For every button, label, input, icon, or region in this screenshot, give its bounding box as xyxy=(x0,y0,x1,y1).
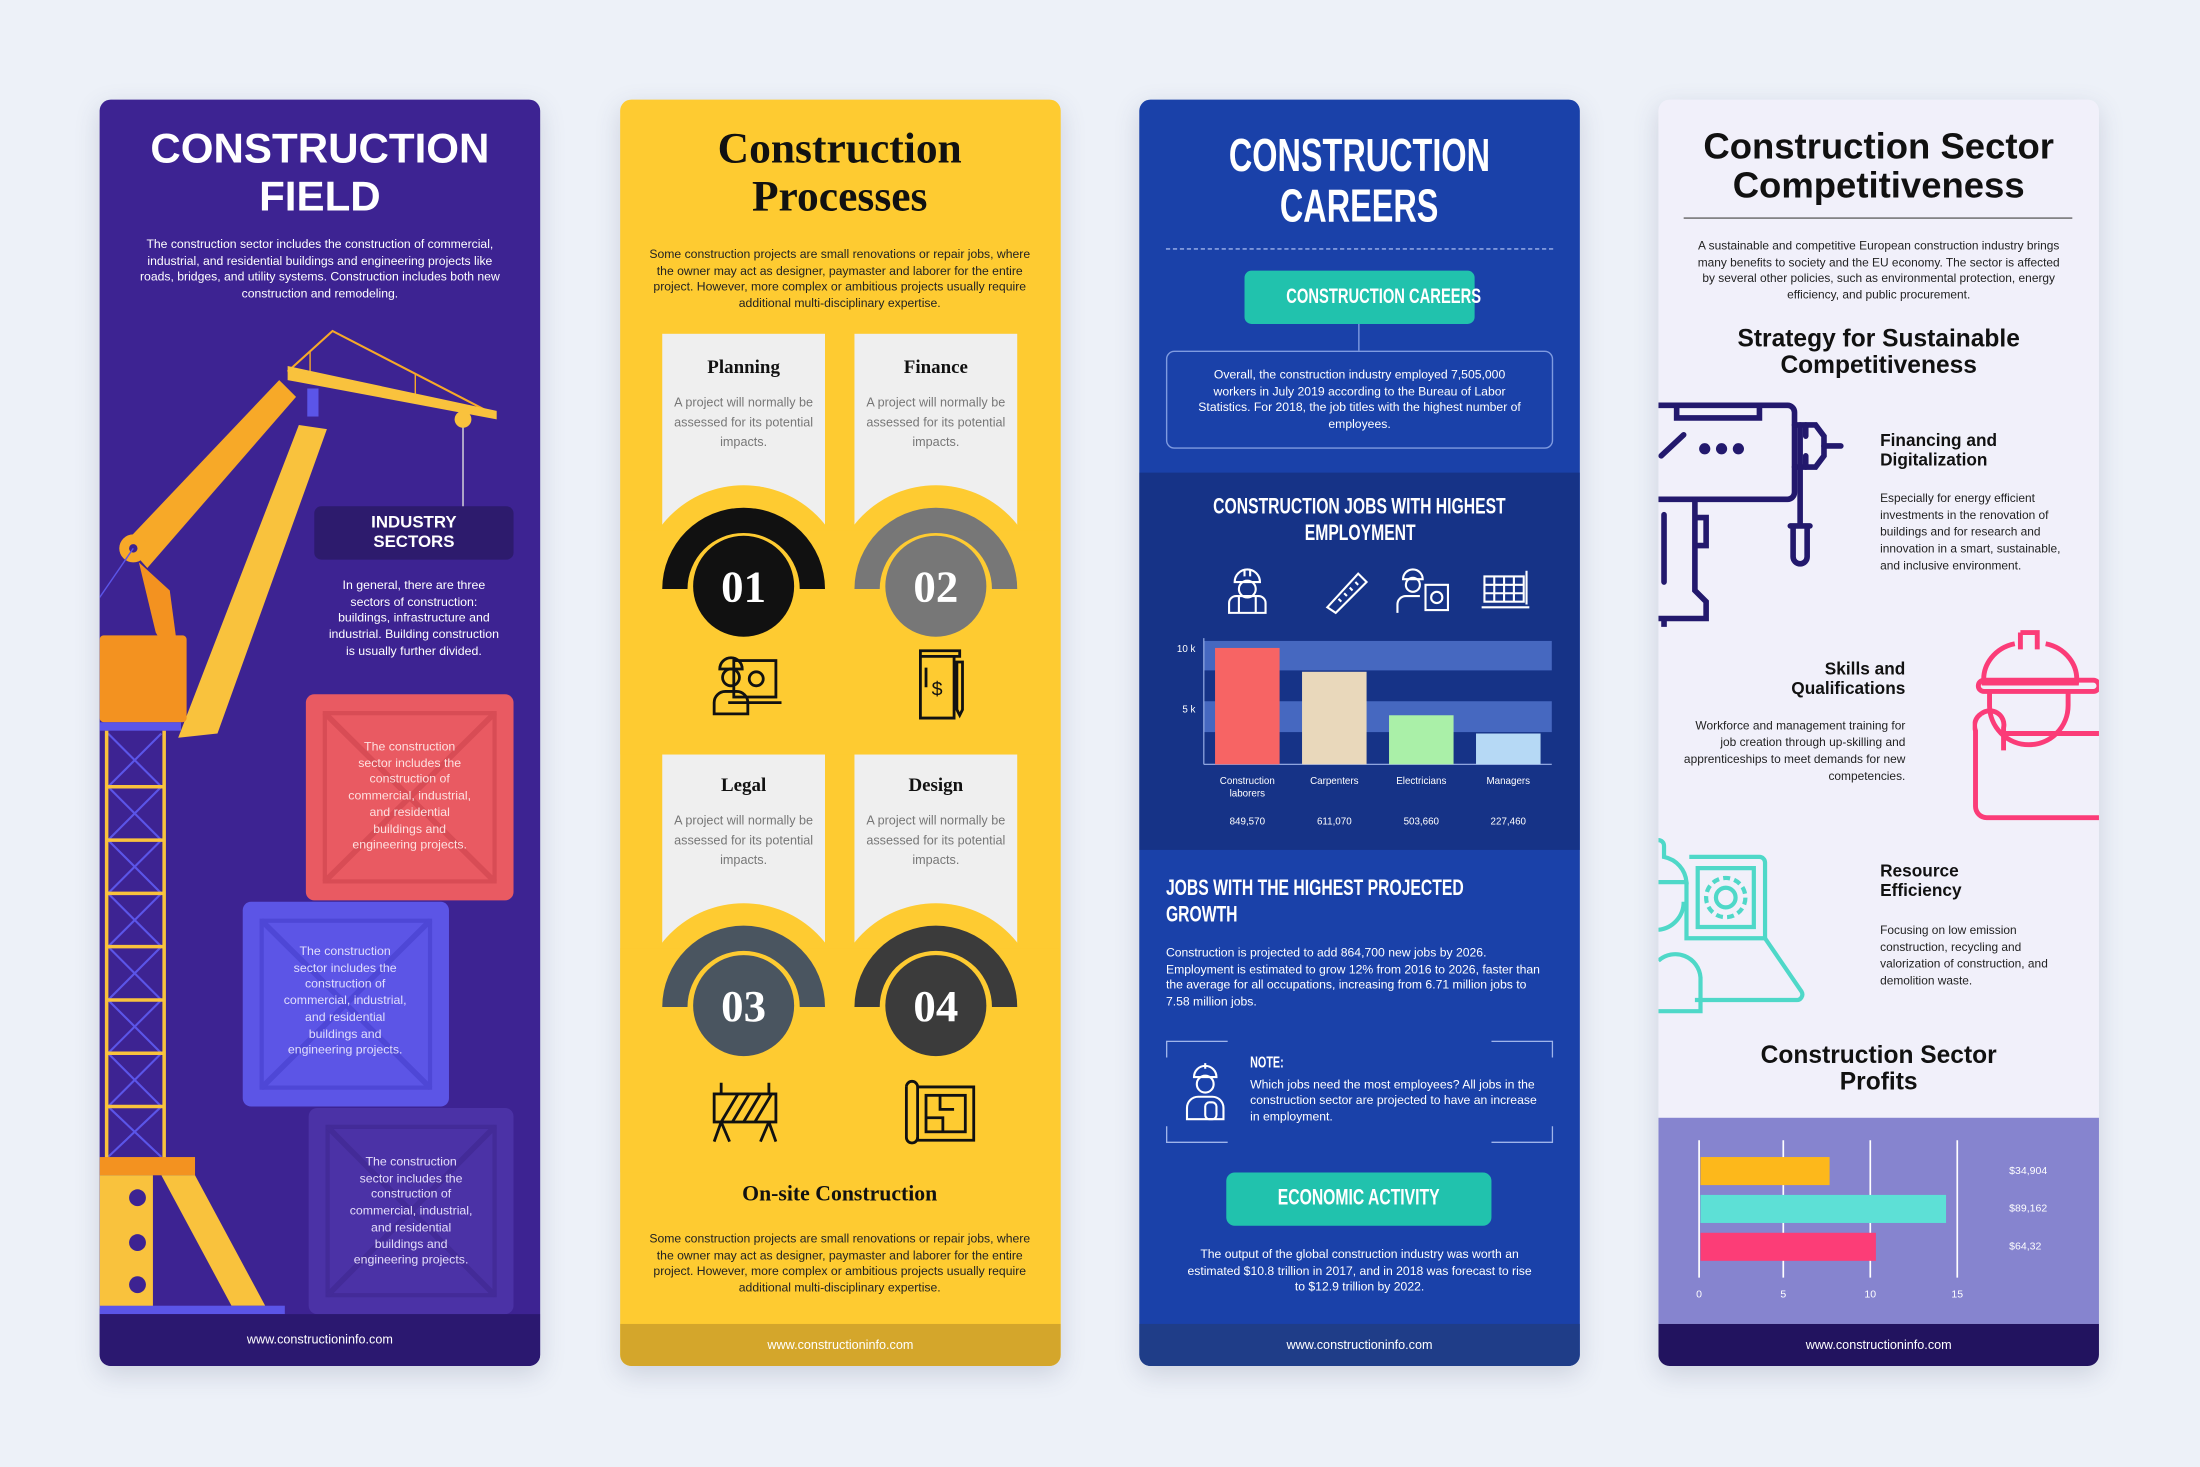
bar chart: Managers xyxy=(1486,776,1530,787)
footer: www.constructioninfo.com xyxy=(767,1338,913,1352)
box: red xyxy=(306,694,514,900)
footer: www.constructioninfo.com xyxy=(1287,1338,1433,1352)
icons row xyxy=(1228,568,1530,614)
horizontal bar chart: 5 xyxy=(1780,1288,1786,1300)
title: Competitiveness xyxy=(1733,164,2025,206)
connector line xyxy=(1358,324,1360,351)
heading: projected growth: JOBS WITH THE HIGHEST PROJECTED xyxy=(1166,877,1464,900)
box: red: The construction sector includes the construction of commercial, industrial, and residential buildings and engineering projects. xyxy=(348,739,471,852)
employment summary box: Overall, the construction industry employed 7,505,000 workers in July 2019 according to the Bureau of Labor Statistics. For 2018, the job titles with the highest number of employees. xyxy=(1198,367,1521,431)
intro text: The construction sector includes the construction of commercial, industrial, and residential buildings and engineering projects like roads, bridges, and utility systems. Construction includes both new construction and remodeling. xyxy=(140,237,500,300)
employment values: 849,570 xyxy=(1230,817,1266,828)
button: construction careers: CONSTRUCTION CAREERS xyxy=(1286,285,1481,309)
bar chart: Carpenters xyxy=(1310,776,1359,787)
subheading: profits: Profits xyxy=(1840,1067,1918,1095)
title xyxy=(150,126,489,220)
horizontal bar chart: $89,162 xyxy=(2009,1203,2047,1215)
card: legal: Legal xyxy=(721,774,766,795)
button: construction careers xyxy=(1245,271,1475,324)
divider xyxy=(1684,217,2072,219)
footer xyxy=(100,1314,540,1366)
heading: projected growth: GROWTH xyxy=(1166,903,1238,927)
panel: competitiveness xyxy=(1658,100,2099,1366)
note text: NOTE: xyxy=(1250,1055,1284,1071)
subheading: profits: Construction Sector xyxy=(1761,1041,1997,1069)
growth text: Construction is projected to add 864,700 new jobs by 2026. Employment is estimated to grow 12% from 2016 to 2026, faster than the average for all occupations, increasing from 6.71 million jobs to 7.58 million jobs. xyxy=(1166,945,1540,1009)
box: blue: The construction sector includes the construction of commercial, industrial, and residential buildings and engineering projects. xyxy=(284,944,407,1056)
panel: construction careers xyxy=(1139,100,1580,1366)
title xyxy=(718,123,962,220)
icon: finance scroll: $ xyxy=(932,679,943,701)
horizontal bar chart: $34,904 xyxy=(2009,1165,2047,1177)
heading xyxy=(1213,495,1506,546)
footer xyxy=(620,1324,1061,1366)
subheading: strategy: Strategy for Sustainable xyxy=(1737,324,2020,352)
bar chart xyxy=(1177,638,1552,800)
card: planning: Planning xyxy=(707,356,780,377)
heading: EMPLOYMENT xyxy=(1304,522,1415,546)
section: jobs with highest employment xyxy=(1139,473,1580,850)
item: resource efficiency: Efficiency xyxy=(1880,881,1962,901)
card: legal xyxy=(674,774,813,867)
subheading: strategy xyxy=(1737,324,2020,379)
industry sectors label xyxy=(314,506,514,560)
intro text: A sustainable and competitive European construction industry brings many benefits to society and the EU economy. The sector is affected by several other policies, such as environmental protection, energy efficiency, and public procurement. xyxy=(1698,238,2060,302)
item: financing and digitalization: Financing and xyxy=(1880,431,1997,450)
footer: www.constructioninfo.com xyxy=(1806,1338,1952,1352)
card: legal: A project will normally be assessed for its potential impacts. xyxy=(674,813,813,867)
button: economic activity xyxy=(1226,1172,1491,1226)
bar chart: 5 k xyxy=(1182,704,1195,715)
employment values xyxy=(1230,817,1527,828)
box: blue xyxy=(243,902,449,1107)
industry sectors label: INDUSTRY xyxy=(371,512,457,532)
bar chart: 10 k xyxy=(1177,644,1195,655)
title xyxy=(1229,129,1490,231)
card: finance: Finance xyxy=(904,356,968,377)
subheading: strategy: Competitiveness xyxy=(1780,351,1977,379)
step cards with number arcs: 04 xyxy=(913,981,958,1031)
note box xyxy=(1166,1040,1554,1143)
card: planning: A project will normally be assessed for its potential impacts. xyxy=(674,395,813,449)
card: planning xyxy=(674,356,813,449)
item: skills and qualifications: Qualifications xyxy=(1791,679,1905,699)
icon: pink helmet blueprint xyxy=(1972,630,2099,820)
step cards with number arcs: 03 xyxy=(721,981,766,1031)
title: Construction Sector xyxy=(1703,125,2054,167)
title xyxy=(1703,125,2054,206)
card: design: Design xyxy=(908,774,963,795)
footer xyxy=(1658,1324,2099,1366)
item: financing and digitalization: Digitalization xyxy=(1880,450,1987,470)
card: design xyxy=(866,774,1005,867)
note text xyxy=(1250,1055,1537,1124)
closing text: Some construction projects are small renovations or repair jobs, where the owner may act as designer, paymaster and laborer for the entire project. However, more complex or ambitious projects usually require additional multi-disciplinary expertise. xyxy=(649,1231,1030,1295)
title: CONSTRUCTION xyxy=(1229,129,1490,181)
panel: construction field xyxy=(100,100,540,1366)
heading: projected growth xyxy=(1166,877,1464,927)
note text: Which jobs need the most employees? All jobs in the construction sector are projected to have an increase in employment. xyxy=(1250,1077,1537,1124)
subheading: profits xyxy=(1761,1041,1997,1095)
economic text: The output of the global construction industry was worth an estimated $10.8 trillion in 2017, and in 2018 was forecast to rise to $12.9 trillion by 2022. xyxy=(1187,1247,1532,1294)
bar chart: Construction xyxy=(1220,776,1275,787)
item: financing and digitalization: Especially for energy efficient investments in the renovation of buildings and for research and innovation in a smart, sustainable, and inclusive environment. xyxy=(1880,491,2060,572)
icon: drill xyxy=(1658,402,1844,627)
item: skills and qualifications: Workforce and management training for job creation through up-skilling and apprenticeships to meet demands for new competencies. xyxy=(1684,719,1905,783)
item: skills and qualifications xyxy=(1684,659,1906,783)
icon: worker with wrench xyxy=(1186,1063,1224,1120)
item: resource efficiency: Resource xyxy=(1880,861,1959,881)
title: CAREERS xyxy=(1280,180,1439,231)
intro text: Some construction projects are small renovations or repair jobs, where the owner may act as designer, paymaster and laborer for the entire project. However, more complex or ambitious projects usually require additional multi-disciplinary expertise. xyxy=(649,247,1030,310)
item: financing and digitalization xyxy=(1880,431,2060,572)
horizontal bar chart: $64,32 xyxy=(2009,1241,2042,1253)
card: design: A project will normally be assessed for its potential impacts. xyxy=(866,813,1005,867)
employment values: 503,660 xyxy=(1404,817,1440,828)
title: Construction xyxy=(718,123,962,173)
horizontal bar chart xyxy=(1658,1118,2099,1324)
item: resource efficiency xyxy=(1880,861,2048,988)
item: skills and qualifications: Skills and xyxy=(1825,659,1905,679)
box: purple xyxy=(309,1108,514,1314)
icon: engineer with screen xyxy=(712,656,782,716)
horizontal bar chart: 15 xyxy=(1951,1288,1963,1300)
box: purple: The construction sector includes the construction of commercial, industrial, and residential buildings and engineering projects. xyxy=(350,1154,472,1267)
bar chart: laborers xyxy=(1230,789,1265,800)
heading: CONSTRUCTION JOBS WITH HIGHEST xyxy=(1213,495,1506,519)
title: Processes xyxy=(752,171,927,220)
step cards with number arcs xyxy=(620,334,1018,1172)
industry sectors text: In general, there are three sectors of construction: buildings, infrastructure and industrial. Building construction is usually further divided. xyxy=(329,578,499,658)
employment values: 611,070 xyxy=(1317,817,1352,828)
employment values: 227,460 xyxy=(1491,817,1527,828)
step cards with number arcs: 02 xyxy=(913,562,958,612)
icon: finance scroll xyxy=(919,649,964,720)
title: CONSTRUCTION xyxy=(150,126,489,173)
horizontal bar chart: 0 xyxy=(1696,1288,1702,1300)
item: resource efficiency: Focusing on low emission construction, recycling and valorization of construction, and demolition waste. xyxy=(1880,923,2048,988)
employment summary box xyxy=(1166,351,1553,449)
crane illustration xyxy=(100,330,497,1314)
card: finance: A project will normally be assessed for its potential impacts. xyxy=(866,395,1005,449)
step cards with number arcs: 01 xyxy=(721,562,766,612)
footer: www.constructioninfo.com xyxy=(247,1332,393,1346)
panel: construction processes xyxy=(620,100,1061,1366)
dashed divider xyxy=(1166,248,1553,250)
button: economic activity: ECONOMIC ACTIVITY xyxy=(1278,1186,1440,1210)
footer xyxy=(1139,1324,1580,1366)
title: FIELD xyxy=(259,174,381,220)
industry sectors label: SECTORS xyxy=(373,531,454,550)
icon: barrier xyxy=(712,1082,778,1142)
icon: teal laptop gear xyxy=(1658,838,1804,1014)
card: finance xyxy=(866,356,1005,449)
heading: on-site construction: On-site Construction xyxy=(742,1182,937,1206)
bar chart: Electricians xyxy=(1396,776,1446,787)
horizontal bar chart: 10 xyxy=(1864,1288,1876,1300)
icon: blueprint xyxy=(904,1080,976,1144)
